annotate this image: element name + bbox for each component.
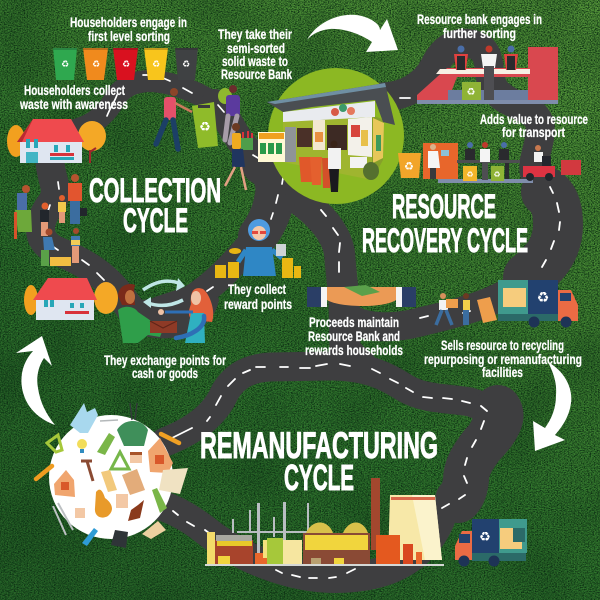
panel: reusable products circle [36, 403, 188, 548]
text: collect reward points: They collect [228, 282, 286, 297]
text: adds value: for transport [502, 125, 565, 140]
icon: handshake with money [307, 285, 416, 307]
road: resource recovery cycle [300, 43, 560, 366]
text: collect reward points [224, 282, 292, 312]
text: take waste to resource bank [218, 27, 293, 82]
title: resource recovery cycle [362, 188, 528, 260]
text: exchange points [104, 353, 227, 381]
people: pink shirt person pushing recycling bin [156, 88, 218, 149]
text: collect waste: Householders collect [24, 83, 125, 98]
panel: value adding line with forklift: ♻ [466, 170, 474, 179]
icon: reward person with coins and phone [215, 219, 301, 278]
road: remanufacturing cycle [160, 364, 500, 578]
text: take waste to resource bank: Resource Bank [221, 67, 292, 82]
road: collection cycle [40, 75, 284, 334]
title: collection cycle: CYCLE [123, 202, 188, 240]
text: collect waste [19, 83, 128, 112]
panel: remanufacturing factory [205, 478, 444, 566]
icon: people exchanging with cycle arrows [118, 278, 213, 343]
arrow: left curved white arrow [16, 336, 55, 425]
panel: resource bank circle with shop [258, 68, 404, 204]
text: sells resource [424, 338, 582, 380]
icon: five sorting bins: ♻ [61, 60, 69, 70]
panel: value adding line with forklift: ♻ [404, 160, 414, 173]
text: collect waste: waste with awareness [19, 97, 128, 112]
text: further sorting: Resource bank engages in [417, 12, 542, 27]
text: proceeds [305, 315, 403, 358]
icon: five sorting bins [53, 48, 198, 80]
icon: upper house with trees [7, 119, 106, 163]
text: exchange points: cash or goods [132, 366, 198, 381]
people: pink shirt person pushing recycling bin: ♻ [199, 120, 211, 135]
text: first level sorting: first level sorting [88, 29, 170, 44]
title: remanufacturing cycle [200, 425, 438, 498]
title: remanufacturing cycle: CYCLE [284, 457, 354, 498]
icon: five sorting bins: ♻ [122, 60, 130, 70]
icon: five sorting bins: ♻ [92, 60, 100, 70]
title: collection cycle [89, 172, 221, 240]
text: further sorting [417, 12, 542, 41]
icon: five sorting bins: ♻ [182, 60, 190, 70]
title: resource recovery cycle: RESOURCE [392, 188, 496, 226]
text: collect reward points: reward points [224, 297, 292, 312]
icon: lower recycling truck: ♻ [479, 530, 491, 545]
arrow: right curved white arrow [533, 362, 571, 451]
people: workers carrying boxes [436, 293, 497, 325]
arrow: top curved white arrow [307, 15, 398, 52]
text: adds value [480, 112, 588, 140]
icon: lower recycling truck [455, 519, 527, 566]
text: take waste to resource bank: solid waste to [222, 54, 288, 69]
text: take waste to resource bank: They take their [218, 27, 293, 42]
text: first level sorting: Householders engage in [70, 15, 187, 30]
icon: upper recycling truck [498, 280, 578, 328]
text: exchange points: They exchange points for [104, 353, 227, 368]
text: proceeds: Resource Bank and [308, 329, 400, 344]
icon: five sorting bins: ♻ [152, 60, 160, 70]
people: family collecting waste [14, 174, 87, 266]
people: purple shirt person and woman with recycling [218, 85, 253, 190]
text: further sorting: further sorting [443, 26, 516, 41]
title: remanufacturing cycle: REMANUFACTURING [200, 425, 438, 466]
text: first level sorting [70, 15, 187, 44]
panel: value adding line with forklift: ♻ [493, 170, 501, 179]
panel: value adding line with forklift [398, 142, 581, 183]
title: collection cycle: COLLECTION [89, 172, 221, 210]
text: sells resource: facilities [482, 365, 523, 380]
panel: sorting table with workers: ♻ [467, 87, 476, 98]
panel: sorting table with workers [417, 46, 558, 104]
icon: upper recycling truck: ♻ [537, 290, 549, 306]
text: proceeds: Proceeds maintain [309, 315, 399, 330]
text: proceeds: rewards households [305, 343, 403, 358]
text: take waste to resource bank: semi-sorted [227, 41, 285, 56]
icon: lower house with trees [24, 278, 118, 320]
